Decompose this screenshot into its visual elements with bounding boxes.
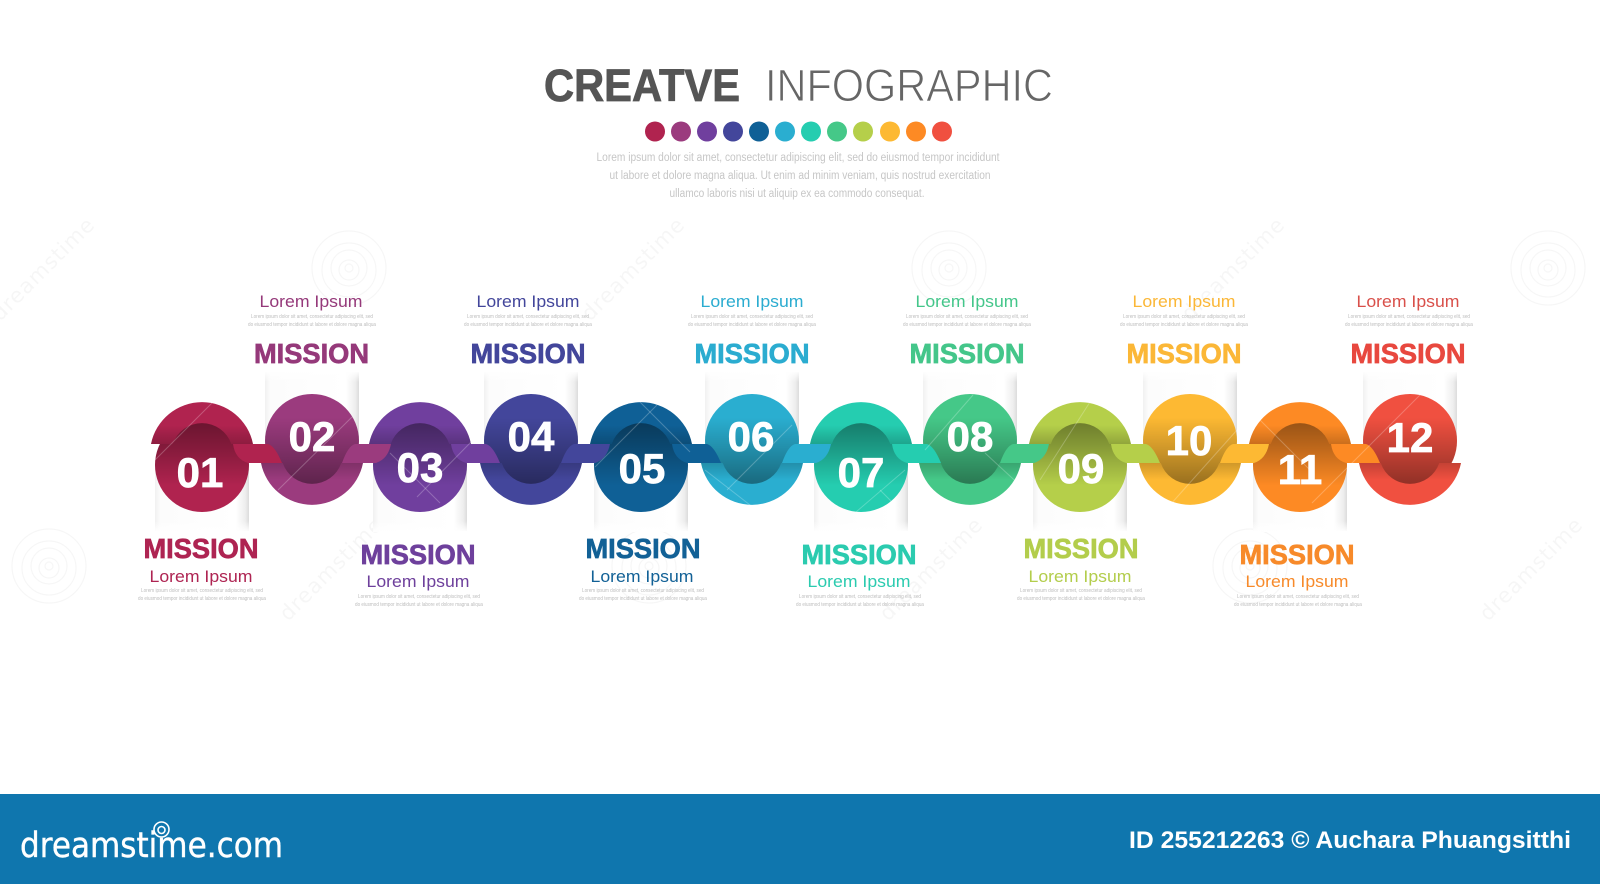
step 11 labels: Lorem ipsum dolor sit amet, consectetur adipiscing elit, sed xyxy=(1237,594,1359,600)
step 08 labels: MISSION xyxy=(910,338,1024,369)
title: INFOGRAPHIC xyxy=(765,60,1053,111)
step 08 labels: Lorem ipsum dolor sit amet, consectetur adipiscing elit, sed xyxy=(906,314,1028,320)
step 01 xyxy=(138,402,282,602)
step 07 circle xyxy=(810,402,912,532)
icon: logo spiral xyxy=(154,822,169,837)
step 08 labels: do eiusmod tempor incididunt ut labore et dolore magna aliqua xyxy=(903,322,1031,328)
step 11 xyxy=(1234,402,1380,608)
step 10 labels: MISSION xyxy=(1126,338,1242,369)
title xyxy=(544,60,1053,111)
step 04 labels: Lorem ipsum dolor sit amet, consectetur adipiscing elit, sed xyxy=(467,314,589,320)
step 01 number: 01 xyxy=(177,449,223,496)
step 11 link xyxy=(1331,444,1380,463)
step 10 xyxy=(1120,292,1269,505)
step 01 link xyxy=(233,444,282,463)
step 10 labels: do eiusmod tempor incididunt ut labore et dolore magna aliqua xyxy=(1120,322,1248,328)
step 11 circle xyxy=(1249,402,1351,532)
intro paragraph xyxy=(596,152,1000,200)
step 04 number: 04 xyxy=(508,413,555,460)
footer credit: ID 255212263 © Auchara Phuangsitthi xyxy=(1129,827,1571,854)
step 02 labels: Lorem Ipsum xyxy=(260,292,362,311)
step 01 labels: Lorem Ipsum xyxy=(150,567,252,586)
intro paragraph: Lorem ipsum dolor sit amet, consectetur adipiscing elit, sed do eiusmod tempor incididunt xyxy=(596,152,1000,164)
step 09 link xyxy=(1111,444,1160,463)
step 10 link xyxy=(1220,444,1269,463)
step 09 number: 09 xyxy=(1058,445,1104,492)
watermark lines over circles xyxy=(155,395,1420,512)
step 02 labels: MISSION xyxy=(254,338,369,369)
intro paragraph: ullamco laboris nisi ut aliquip ex ea commodo consequat. xyxy=(670,188,924,200)
footer logo text: dreamstime.com xyxy=(20,826,283,866)
step 03 labels xyxy=(355,539,483,608)
step 09 labels: MISSION xyxy=(1024,533,1138,564)
step 02 circle xyxy=(261,371,363,505)
step 12 number: 12 xyxy=(1387,414,1433,461)
step 05 number: 05 xyxy=(619,445,665,492)
step 05 xyxy=(579,402,721,602)
step 07 labels: MISSION xyxy=(802,539,916,570)
watermark pattern: dreamstime xyxy=(577,212,690,326)
step 09 labels: Lorem Ipsum xyxy=(1028,567,1132,586)
step 08 circle xyxy=(919,371,1021,505)
step 03 labels: MISSION xyxy=(360,539,476,570)
step 12 labels: MISSION xyxy=(1350,338,1466,369)
step 07 xyxy=(796,402,941,608)
step 04 circle xyxy=(480,371,582,505)
step 04 labels xyxy=(464,292,592,369)
colour dot row xyxy=(645,122,952,142)
step 02 labels: do eiusmod tempor incididunt ut labore et dolore magna aliqua xyxy=(248,322,376,328)
step 05 labels: do eiusmod tempor incididunt ut labore et dolore magna aliqua xyxy=(579,596,707,602)
step 09 labels: Lorem ipsum dolor sit amet, consectetur adipiscing elit, sed xyxy=(1020,588,1142,594)
step 06 labels: Lorem ipsum dolor sit amet, consectetur adipiscing elit, sed xyxy=(691,314,813,320)
step 04 labels: do eiusmod tempor incididunt ut labore et dolore magna aliqua xyxy=(464,322,592,328)
step 11 labels: MISSION xyxy=(1240,539,1354,570)
step 06 labels: do eiusmod tempor incididunt ut labore et dolore magna aliqua xyxy=(688,322,816,328)
step 02 number: 02 xyxy=(289,413,335,460)
step 10 labels: Lorem ipsum dolor sit amet, consectetur adipiscing elit, sed xyxy=(1123,314,1245,320)
step 03 labels: Lorem Ipsum xyxy=(366,572,470,591)
step 07 labels xyxy=(796,539,924,608)
step 05 link xyxy=(672,444,721,463)
step 01 labels: do eiusmod tempor incididunt ut labore et dolore magna aliqua xyxy=(138,596,266,602)
step 12 labels: Lorem Ipsum xyxy=(1356,292,1460,311)
step 04 labels: MISSION xyxy=(470,338,586,369)
step 08 labels xyxy=(903,292,1031,369)
step 06 labels xyxy=(688,292,816,369)
step 06 number: 06 xyxy=(728,413,774,460)
step 06 link xyxy=(782,444,831,463)
step 12 xyxy=(1345,292,1473,505)
step 07 labels: do eiusmod tempor incididunt ut labore et dolore magna aliqua xyxy=(796,602,924,608)
step 09 labels: do eiusmod tempor incididunt ut labore et dolore magna aliqua xyxy=(1017,596,1145,602)
step 04 xyxy=(464,292,610,505)
step 01 circle xyxy=(151,402,253,532)
step 02 labels xyxy=(248,292,376,369)
step 11 labels: do eiusmod tempor incididunt ut labore et dolore magna aliqua xyxy=(1234,602,1362,608)
title: CREATVE xyxy=(544,60,740,111)
watermark pattern: dreamstime xyxy=(1177,212,1290,326)
step 07 labels: Lorem Ipsum xyxy=(808,572,910,591)
step 06 xyxy=(688,292,831,505)
intro paragraph: ut labore et dolore magna aliqua. Ut enim ad minim veniam, quis nostrud exercitation xyxy=(610,170,990,182)
step 02 link xyxy=(342,444,391,463)
step 03 labels: do eiusmod tempor incididunt ut labore et dolore magna aliqua xyxy=(355,602,483,608)
footer bar xyxy=(0,794,1600,884)
step 10 labels xyxy=(1120,292,1248,369)
step 03 labels: Lorem ipsum dolor sit amet, consectetur adipiscing elit, sed xyxy=(358,594,480,600)
step 11 labels: Lorem Ipsum xyxy=(1246,572,1348,591)
watermark pattern: dreamstime xyxy=(875,512,988,626)
step 08 labels: Lorem Ipsum xyxy=(916,292,1018,311)
step 08 link xyxy=(1000,444,1049,463)
step 09 xyxy=(1017,402,1160,602)
watermark pattern: dreamstime xyxy=(275,512,388,626)
step 09 circle xyxy=(1029,402,1131,532)
step 10 number: 10 xyxy=(1166,417,1212,464)
step 12 labels: do eiusmod tempor incididunt ut labore et dolore magna aliqua xyxy=(1345,322,1473,328)
step 03 xyxy=(355,402,500,608)
step 01 labels: MISSION xyxy=(144,533,258,564)
step 04 labels: Lorem Ipsum xyxy=(476,292,580,311)
step 10 labels: Lorem Ipsum xyxy=(1132,292,1236,311)
step 11 labels xyxy=(1234,539,1362,608)
step 12 labels: Lorem ipsum dolor sit amet, consectetur adipiscing elit, sed xyxy=(1348,314,1470,320)
step 07 labels: Lorem ipsum dolor sit amet, consectetur adipiscing elit, sed xyxy=(799,594,921,600)
step 05 circle xyxy=(590,402,692,532)
step 07 link xyxy=(892,444,941,463)
step 02 xyxy=(248,292,391,505)
step 01 labels xyxy=(138,533,266,602)
step 08 number: 08 xyxy=(947,413,993,460)
step 05 labels: Lorem ipsum dolor sit amet, consectetur adipiscing elit, sed xyxy=(582,588,704,594)
watermark pattern: dreamstime xyxy=(1475,512,1588,626)
step 10 circle xyxy=(1139,371,1241,505)
step 05 labels xyxy=(579,533,707,602)
step 06 labels: MISSION xyxy=(694,338,810,369)
step 12 circle xyxy=(1359,371,1461,505)
step 05 labels: Lorem Ipsum xyxy=(590,567,694,586)
step 05 labels: MISSION xyxy=(586,533,700,564)
step 06 circle xyxy=(701,371,803,505)
step 04 link xyxy=(561,444,610,463)
step 12 labels xyxy=(1345,292,1473,369)
step 06 labels: Lorem Ipsum xyxy=(700,292,804,311)
step 03 circle xyxy=(369,402,471,532)
step 09 labels xyxy=(1017,533,1145,602)
step 08 xyxy=(903,292,1049,505)
step 07 number: 07 xyxy=(838,449,884,496)
watermark pattern xyxy=(0,212,1588,626)
step 03 number: 03 xyxy=(397,444,443,491)
step 03 link xyxy=(451,444,500,463)
step 11 number: 11 xyxy=(1278,446,1322,493)
step 02 labels: Lorem ipsum dolor sit amet, consectetur adipiscing elit, sed xyxy=(251,314,373,320)
step 01 labels: Lorem ipsum dolor sit amet, consectetur adipiscing elit, sed xyxy=(141,588,263,594)
